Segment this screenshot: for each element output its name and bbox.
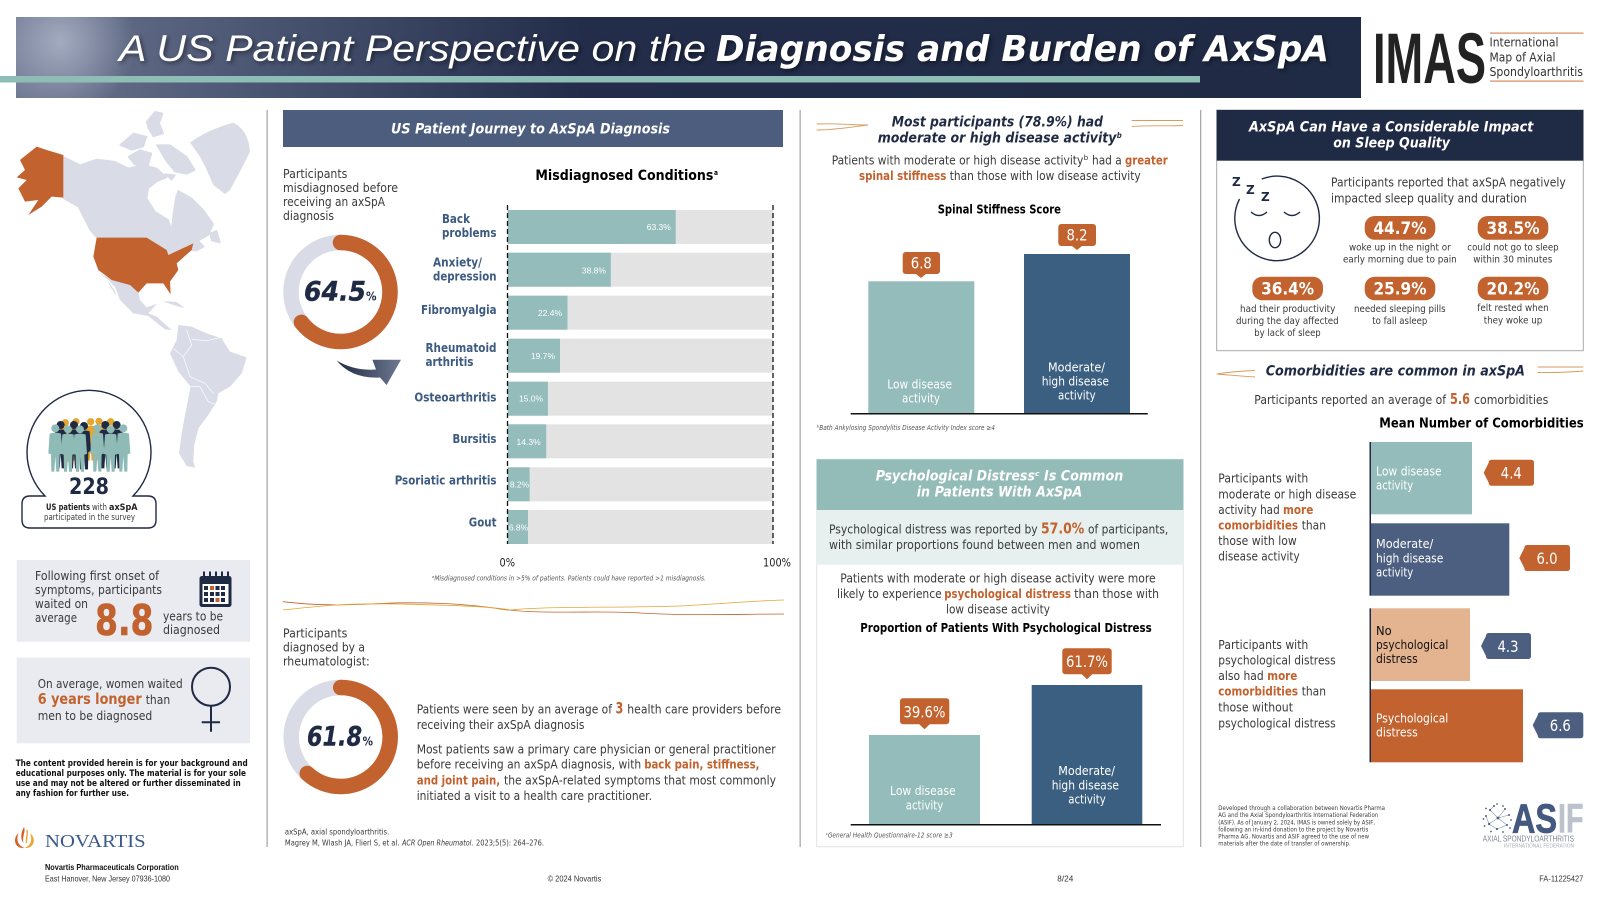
- bar chart: proportion with distress: activity: [1068, 792, 1106, 806]
- heading: Is Common: [1044, 469, 1123, 485]
- text block: disease activity comparison: than: [1302, 518, 1326, 532]
- bar chart: misdiagnosed conditions: 22.4%: [538, 308, 562, 318]
- ASIF logo: [1483, 796, 1584, 849]
- collaboration note: (ASIF). As of January 2, 2024, IMAS is owned solely by ASIF,: [1218, 818, 1375, 826]
- panel: 8.8 years wait: waited on: [35, 597, 88, 611]
- bar chart: misdiagnosed conditions: ᵃMisdiagnosed conditions in >5% of patients. Patients could have reported >1 misdiagnosis.: [432, 575, 706, 583]
- callout: 6.6: [1533, 712, 1583, 738]
- bar chart: proportion with distress: activity: [906, 798, 943, 812]
- callout: 57.0%: of participants,: [1088, 522, 1168, 536]
- callout: 228 US patients: 228: [69, 475, 109, 500]
- text block: psychological distress comparison: also had: [1218, 669, 1264, 683]
- disclaimer text: educational purposes only. The material is for your sole: [16, 769, 246, 779]
- text block: spinal stiffness: [832, 153, 1168, 183]
- text block: spinal stiffness: spinal stiffness: [859, 169, 946, 183]
- donut chart: 61.8%: [291, 688, 390, 786]
- bar chart: spinal stiffness score: [851, 201, 1148, 414]
- icon: female symbol: [192, 668, 230, 732]
- bar chart: misdiagnosed conditions: Anxiety/: [433, 255, 482, 270]
- bar chart: proportion with distress: high disease: [1052, 778, 1119, 792]
- text block: psychological distress comparison: Participants with: [1218, 638, 1308, 652]
- callout: 228 US patients: participated in the survey: [44, 513, 135, 523]
- heading: b: [1117, 131, 1122, 140]
- heading: c: [1035, 470, 1040, 478]
- heading: moderate or high disease activity: [878, 131, 1117, 147]
- callout: 57.0%: Psychological distress was reported by: [829, 522, 1038, 536]
- callout: 61.7%: 61.7%: [1066, 652, 1108, 671]
- stat: 36.4%: by lack of sleep: [1254, 328, 1321, 339]
- heading: in Patients With AxSpA: [917, 485, 1082, 501]
- text block: spinal stiffness: Patients with moderate or high disease activity: [832, 153, 1083, 167]
- heading: [1217, 110, 1583, 161]
- Novartis logo: East Hanover, New Jersey 07936-1080: [45, 874, 170, 884]
- IMAS logo: Spondyloarthritis: [1490, 64, 1583, 79]
- stat: 44.7%: 44.7%: [1374, 219, 1426, 239]
- text block: average comorbidities: 5.6: [1450, 390, 1470, 408]
- text block: spinal stiffness: than those with low disease activity: [950, 169, 1141, 183]
- bar chart: misdiagnosed conditions: 8.2%: [510, 480, 530, 490]
- heading: Comorbidities are common in axSpA: [1266, 364, 1525, 380]
- panel: women waited longer: than: [146, 693, 170, 707]
- panel: women waited longer: On average, women waited: [38, 677, 183, 691]
- document code: FA-11225427: [1539, 874, 1584, 884]
- IMAS logo: IMAS: [1373, 20, 1486, 99]
- heading: Most participants (78.9%) had: [892, 115, 1104, 131]
- icon: calendar: [200, 572, 232, 607]
- disclaimer text: use and may not be altered or further disseminated in: [16, 779, 241, 789]
- Greenland: [190, 123, 250, 194]
- header banner: [0, 17, 1361, 98]
- text block: psychological distress comparison: more: [1267, 669, 1297, 683]
- bar chart: proportion with distress: [851, 620, 1161, 826]
- text block: likely to experience: [837, 587, 942, 601]
- stat: 38.5%: 38.5%: [1486, 219, 1540, 239]
- bar chart: spinal stiffness score: Low disease: [887, 377, 952, 391]
- donut chart: 64.5%: 64.5: [304, 276, 366, 308]
- panel: 8.8 years wait: [17, 560, 250, 645]
- text block: psychological distress comparison: than: [1302, 685, 1326, 699]
- references: 2023;5(5): 264–276.: [476, 838, 544, 847]
- stat: 20.2%: they woke up: [1484, 315, 1542, 326]
- callout: 6.8: 6.8: [911, 254, 932, 272]
- references: Magrey M, Wlash JA, Flierl S, et al.: [285, 838, 399, 847]
- donut chart: 64.5%: [291, 242, 390, 342]
- text block: Patients with moderate or high disease activity were more: [840, 571, 1156, 585]
- stat: 36.4%: [1236, 277, 1339, 339]
- donut chart: 61.8%: 61.8: [307, 722, 362, 752]
- panel: 8.8 years wait: Following first onset of: [35, 569, 160, 583]
- disclaimer text: The content provided herein is for your background and: [16, 759, 248, 769]
- icon: sleeping face: Z: [1246, 183, 1255, 197]
- text block: health care providers: and joint pain,: [417, 773, 500, 787]
- collaboration note: AG and the Axial Spondyloarthritis International Federation: [1218, 811, 1378, 819]
- bar chart: by psychological distress: psychological: [1376, 638, 1448, 652]
- text block: spinal stiffness: greater: [1125, 153, 1168, 167]
- text block: health care providers: the axSpA-related symptoms that most commonly: [504, 773, 776, 787]
- footnote: ᶜGeneral Health Questionnaire-12 score ≥3: [826, 832, 953, 840]
- bar chart: misdiagnosed conditions: Osteoarthritis: [414, 390, 496, 405]
- bar chart: misdiagnosed conditions: arthritis: [426, 354, 474, 369]
- heading: [878, 115, 1122, 147]
- panel: sleep quality: [1217, 110, 1583, 351]
- callout: 4.4: 4.4: [1501, 464, 1522, 482]
- callout: 6.8: [903, 252, 940, 278]
- Canada and Arctic: [63, 112, 220, 255]
- text block: disease activity comparison: disease activity: [1218, 550, 1300, 564]
- text block: disease activity comparison: [1218, 472, 1356, 564]
- text block: [837, 571, 1159, 617]
- text block: psychological distress comparison: psychological distress: [1218, 654, 1336, 668]
- text block: sleep intro: impacted sleep quality and duration: [1331, 192, 1527, 206]
- IMAS logo: International: [1490, 35, 1558, 50]
- callout: 39.6%: 39.6%: [904, 702, 946, 721]
- text block: health care providers: receiving their axSpA diagnosis: [417, 718, 584, 732]
- panel: women waited longer: [17, 658, 250, 743]
- text block: psychological distress: [944, 587, 1071, 601]
- text block: health care providers: Patients were seen by an average of: [417, 702, 613, 716]
- callout: 228 US patients: US patients: [46, 503, 90, 513]
- disclaimer text: any fashion for further use.: [16, 789, 129, 799]
- stat: 44.7%: early morning due to pain: [1343, 255, 1457, 266]
- collaboration note: [1218, 804, 1385, 848]
- text block: health care providers: Most patients saw a primary care physician or general practitioner: [417, 742, 776, 756]
- bar chart: spinal stiffness score: activity: [902, 392, 940, 406]
- icon: sleeping face: Z: [1261, 190, 1270, 204]
- contiguous United States: [93, 238, 193, 294]
- bar chart: proportion with distress: Proportion of Patients With Psychological Distress: [860, 620, 1152, 635]
- bar chart: spinal stiffness score: high disease: [1042, 375, 1109, 389]
- Novartis logo: NOVARTIS: [45, 831, 146, 851]
- text block: disease activity comparison: comorbidities: [1218, 518, 1298, 532]
- panel: disease activity: [817, 115, 1183, 432]
- bar chart: misdiagnosed conditions: Back: [442, 211, 471, 226]
- text block: misdiagnosed: diagnosis: [283, 209, 334, 223]
- references: axSpA, axial spondyloarthritis.: [285, 828, 389, 837]
- heading: US Patient Journey to AxSpA Diagnosis: [391, 122, 670, 138]
- collaboration note: following an in-kind donation to the project by Novartis: [1218, 825, 1369, 833]
- bar chart: misdiagnosed conditions: [395, 205, 791, 583]
- text block: psychological distress comparison: psychological distress: [1218, 716, 1336, 730]
- heading: AxSpA Can Have a Considerable Impact: [1248, 120, 1534, 136]
- stat: 25.9%: to fall asleep: [1372, 316, 1427, 327]
- stat: 44.7%: woke up in the night or: [1349, 243, 1451, 254]
- bar chart: misdiagnosed conditions: Psoriatic arthritis: [395, 473, 496, 488]
- bar chart: misdiagnosed conditions: Gout: [469, 514, 497, 529]
- bar chart: misdiagnosed conditions: 6.8%: [509, 522, 529, 532]
- Mexico and Central America: [100, 273, 185, 330]
- text block: misdiagnosed: [283, 167, 398, 223]
- bar chart: misdiagnosed conditions: 100%: [763, 555, 791, 569]
- callout: 8.2: [1058, 224, 1096, 250]
- callout: 228 US patients: axSpA: [109, 503, 138, 513]
- panel: 8.8 years wait: years to be: [163, 610, 223, 624]
- bar chart: by psychological distress: distress: [1376, 726, 1418, 740]
- IMAS logo: Map of Axial: [1490, 50, 1556, 65]
- text block: psychological distress comparison: those without: [1218, 700, 1293, 714]
- text block: disease activity comparison: moderate or high disease: [1218, 487, 1356, 501]
- title: A US Patient Perspective on the: [117, 28, 706, 69]
- panel: 8.8 years wait: symptoms, participants: [35, 583, 162, 597]
- text block: average comorbidities: comorbidities: [1474, 393, 1548, 407]
- text block: health care providers: 3: [616, 698, 623, 717]
- callout: 6.6: 6.6: [1550, 716, 1571, 735]
- stat: 44.7%: [1343, 216, 1457, 266]
- copyright: © 2024 Novartis: [548, 873, 601, 883]
- text block: psychological distress comparison: [1218, 638, 1336, 730]
- panel: US patient journey: [283, 110, 791, 847]
- chart title: a: [714, 169, 718, 177]
- callout: 228 US patients: with: [92, 503, 107, 513]
- stat: 25.9%: needed sleeping pills: [1354, 304, 1446, 315]
- heading: on Sleep Quality: [1333, 136, 1451, 152]
- bar chart: misdiagnosed conditions: problems: [442, 225, 496, 240]
- text block: disease activity comparison: more: [1283, 503, 1313, 517]
- chart title: Misdiagnosed Conditions: [535, 168, 713, 184]
- bar chart: misdiagnosed conditions: Bursitis: [452, 431, 496, 446]
- text block: rheumatologist: diagnosed by a: [283, 641, 365, 655]
- bar chart: misdiagnosed conditions: depression: [433, 268, 496, 284]
- bar chart: misdiagnosed conditions: 14.3%: [517, 437, 541, 447]
- callout: 8.2: 8.2: [1066, 226, 1088, 244]
- bar chart: by disease activity: Moderate/: [1376, 537, 1434, 551]
- collaboration note: Developed through a collaboration between Novartis Pharma: [1218, 804, 1385, 812]
- stat: 36.4%: 36.4%: [1261, 280, 1314, 300]
- icon: sleeping face: [1232, 175, 1319, 261]
- donut chart: 64.5%: %: [366, 290, 376, 304]
- text block: disease activity comparison: Participants with: [1218, 472, 1308, 486]
- Alaska: [17, 147, 63, 215]
- bar chart: by psychological distress: Psychological: [1376, 712, 1448, 726]
- panel: psychological distress: [817, 459, 1183, 847]
- text block: rheumatologist: [283, 627, 370, 669]
- bar chart: by psychological distress: [1370, 608, 1583, 762]
- bar chart: proportion with distress: Low disease: [890, 784, 956, 798]
- text block: rheumatologist: Participants: [283, 627, 347, 641]
- panel: 8.8 years wait: diagnosed: [163, 623, 220, 637]
- icon: group of people: [48, 418, 130, 472]
- callout: 4.4: [1484, 460, 1534, 486]
- ASIF logo: INTERNATIONAL FEDERATION: [1504, 843, 1574, 849]
- callout: 57.0%: [817, 510, 1183, 565]
- bar chart: by psychological distress: No: [1376, 624, 1392, 638]
- stat: 25.9%: [1354, 277, 1446, 327]
- text block: low disease activity: [946, 603, 1050, 617]
- collaboration note: materials after the date of transfer of ownership.: [1218, 840, 1351, 848]
- ASIF logo: AXIAL SPONDYLOARTHRITIS: [1483, 834, 1574, 843]
- stat: 20.2%: felt rested when: [1477, 303, 1549, 314]
- callout: 4.3: [1481, 633, 1531, 659]
- stat: 20.2%: [1477, 277, 1549, 326]
- footnote: ᵇBath Ankylosing Spondylitis Disease Activity Index score ≥4: [817, 424, 995, 432]
- panel: 8.8 years wait: 8.8: [95, 596, 154, 645]
- callout: 57.0%: 57.0%: [1041, 519, 1085, 537]
- text block: sleep intro: [1331, 176, 1566, 206]
- text block: average comorbidities: Participants reported an average of: [1254, 393, 1447, 407]
- stat: 36.4%: had their productivity: [1240, 304, 1335, 315]
- bar chart: by disease activity: high disease: [1376, 551, 1443, 565]
- text block: average comorbidities: [1254, 390, 1548, 408]
- text block: health care providers: health care providers before: [627, 702, 781, 716]
- icon: network globe: [1483, 803, 1512, 833]
- map of the Americas: [17, 112, 250, 468]
- bar chart: by disease activity: activity: [1376, 478, 1413, 492]
- bar chart: spinal stiffness score: Spinal Stiffness Score: [938, 201, 1061, 216]
- callout: 6.0: 6.0: [1536, 549, 1558, 568]
- stat: 38.5%: [1467, 216, 1559, 266]
- bar chart: misdiagnosed conditions: Rheumatoid: [426, 340, 496, 355]
- bar chart: by disease activity: Low disease: [1376, 464, 1442, 478]
- callout: 39.6%: [900, 698, 949, 729]
- callout: 57.0%: with similar proportions found between men and women: [829, 538, 1140, 552]
- bar chart: misdiagnosed conditions: Fibromyalgia: [421, 302, 496, 317]
- bar chart: proportion with distress: Moderate/: [1058, 764, 1116, 778]
- text block: rheumatologist: rheumatologist:: [283, 655, 370, 669]
- bar chart: misdiagnosed conditions: 0%: [500, 555, 515, 569]
- title: Diagnosis and Burden of AxSpA: [716, 29, 1329, 70]
- text block: health care providers: initiated a visit to a health care practitioner.: [417, 789, 652, 803]
- stat: 38.5%: could not go to sleep: [1467, 243, 1559, 254]
- text block: health care providers: back pain, stiffness,: [644, 758, 760, 772]
- title: [117, 28, 1329, 70]
- panel: 8.8 years wait: average: [35, 611, 77, 625]
- text block: sleep intro: Participants reported that axSpA negatively: [1331, 176, 1566, 190]
- icon: sleeping face: Z: [1232, 175, 1241, 189]
- Novartis logo: Novartis Pharmaceuticals Corporation: [45, 862, 179, 872]
- bar chart: misdiagnosed conditions: 19.7%: [531, 351, 555, 361]
- bar chart: by disease activity: activity: [1376, 565, 1413, 579]
- text block: misdiagnosed: misdiagnosed before: [283, 181, 398, 195]
- text block: misdiagnosed: Participants: [283, 167, 347, 181]
- arrow: [337, 360, 401, 385]
- references: [285, 828, 544, 847]
- text block: health care providers: [417, 698, 781, 803]
- text block: disease activity comparison: activity had: [1218, 503, 1280, 517]
- ASIF logo: AS: [1512, 796, 1557, 842]
- bar chart: misdiagnosed conditions: 63.3%: [647, 222, 671, 232]
- references: ACR Open Rheumatol.: [401, 838, 474, 847]
- panel: women waited longer: 6 years longer: [38, 690, 142, 708]
- callout: 4.3: 4.3: [1498, 637, 1518, 656]
- panel: comorbidities: [1217, 364, 1584, 762]
- callout: 228 US patients: [22, 390, 156, 528]
- text block: psychological distress comparison: comorbidities: [1218, 685, 1298, 699]
- text block: disease activity comparison: those with low: [1218, 534, 1297, 548]
- bar chart: spinal stiffness score: Moderate/: [1048, 361, 1106, 375]
- disclaimer text: [16, 759, 248, 799]
- bar chart: misdiagnosed conditions: 38.8%: [582, 265, 606, 275]
- text block: spinal stiffness: b: [1084, 154, 1089, 162]
- collaboration note: Pharma AG. Novartis and ASIF agreed to the use of new: [1218, 832, 1370, 840]
- heading: Psychological Distress: [876, 469, 1035, 485]
- stat: 36.4%: during the day affected: [1236, 316, 1339, 327]
- text block: spinal stiffness: had a: [1092, 153, 1122, 167]
- donut chart: 61.8%: %: [362, 734, 373, 748]
- Novartis logo: [15, 827, 179, 884]
- text block: misdiagnosed: receiving an axSpA: [283, 195, 386, 209]
- stat: 20.2%: 20.2%: [1486, 280, 1540, 300]
- callout: 61.7%: [1062, 648, 1112, 679]
- bar chart: by disease activity: [1370, 442, 1570, 596]
- South America: [170, 325, 247, 468]
- heading: [283, 110, 783, 147]
- heading: [817, 459, 1183, 510]
- panel: women waited longer: men to be diagnosed: [38, 709, 152, 723]
- text block: than those with: [1074, 587, 1159, 601]
- ASIF logo: IF: [1558, 796, 1584, 842]
- stat: 38.5%: within 30 minutes: [1473, 255, 1552, 266]
- text block: health care providers: before receiving an axSpA diagnosis, with: [417, 758, 641, 772]
- bar chart: spinal stiffness score: activity: [1058, 389, 1096, 403]
- stat: 25.9%: 25.9%: [1374, 280, 1426, 300]
- bar chart: misdiagnosed conditions: 15.0%: [519, 394, 543, 404]
- bar chart: by psychological distress: distress: [1376, 652, 1418, 666]
- page number: 8/24: [1057, 873, 1074, 883]
- callout: 6.0: [1519, 545, 1570, 571]
